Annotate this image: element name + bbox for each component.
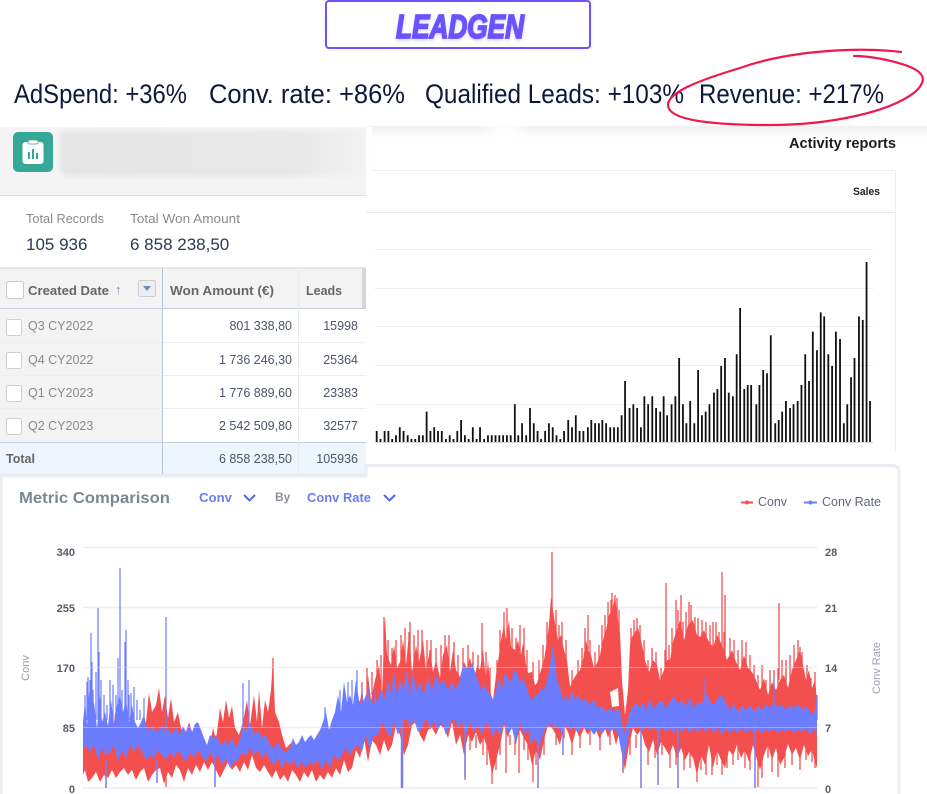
axis title: conv: Conv xyxy=(20,655,32,681)
left axis: 85 xyxy=(63,723,75,735)
left axis: 170 xyxy=(57,663,75,675)
row: Q4 CY2022: Q4 CY2022 xyxy=(28,353,93,367)
row: Q4 CY2022 xyxy=(6,352,358,368)
legend: Conv Rate xyxy=(822,495,881,509)
selector: conv rate: Conv Rate xyxy=(307,491,371,505)
panel: leads table xyxy=(0,127,372,474)
stat: total records xyxy=(26,212,104,254)
row: total: 6 858 238,50 xyxy=(219,452,292,466)
row: Q1 CY2023: 1 776 889,60 xyxy=(219,386,292,400)
panel: metric comparison xyxy=(1,466,899,794)
left axis: 255 xyxy=(57,603,75,615)
table header: Created Date xyxy=(28,284,109,298)
table header: Leads xyxy=(306,284,342,298)
axis title: conv rate: Conv Rate xyxy=(871,642,883,694)
row: Q4 CY2022: 25364 xyxy=(323,353,358,367)
callout: hand-drawn red ellipse xyxy=(668,50,923,125)
right axis: 21 xyxy=(825,603,837,615)
right axis: 28 xyxy=(825,547,837,559)
row: total: 105936 xyxy=(316,452,358,466)
row: Q3 CY2022: Q3 CY2022 xyxy=(28,319,93,333)
row: total: Total xyxy=(6,452,35,466)
stat: total won amount: 6 858 238,50 xyxy=(130,235,229,254)
stat: total records: 105 936 xyxy=(26,235,87,254)
left axis xyxy=(57,547,75,794)
stats row xyxy=(14,79,884,109)
selector: conv: Conv xyxy=(199,491,232,505)
stat: total won amount xyxy=(130,212,241,254)
row: Q4 CY2022: 1 736 246,30 xyxy=(219,353,292,367)
stat: total records: Total Records xyxy=(26,212,104,226)
blurred title xyxy=(60,131,370,176)
label: by: By xyxy=(275,490,291,504)
title badge: leadgen: LEADGEN xyxy=(396,8,525,45)
row: Q3 CY2022: 15998 xyxy=(323,319,358,333)
row: Q2 CY2023: Q2 CY2023 xyxy=(28,419,93,433)
row: total xyxy=(6,452,358,466)
bar chart: sales xyxy=(377,262,870,442)
stat: qualified leads: Qualified Leads: +103% xyxy=(425,79,684,109)
title badge: leadgen xyxy=(326,1,590,48)
legend xyxy=(741,495,881,509)
heading: metric comparison: Metric Comparison xyxy=(19,490,170,507)
table header xyxy=(6,280,342,298)
table header: Won Amount (€) xyxy=(170,284,274,298)
row: Q3 CY2022: 801 338,80 xyxy=(229,319,292,333)
stat: revenue: Revenue: +217% xyxy=(699,79,884,109)
row: Q1 CY2023: Q1 CY2023 xyxy=(28,386,93,400)
row: Q2 CY2023: 2 542 509,80 xyxy=(219,419,292,433)
line series: conv rate xyxy=(83,568,817,788)
right axis xyxy=(825,547,838,794)
label: sales: Sales xyxy=(853,186,880,198)
heading: activity reports: Activity reports xyxy=(789,136,896,152)
table header: ↑ xyxy=(115,282,122,297)
row: Q2 CY2023 xyxy=(6,418,358,434)
row: Q3 CY2022 xyxy=(6,319,358,336)
right axis: 7 xyxy=(825,723,831,735)
left axis: 340 xyxy=(57,547,75,559)
row: Q1 CY2023 xyxy=(6,386,358,402)
panel: activity reports xyxy=(366,120,927,452)
legend: Conv xyxy=(758,495,788,509)
icon: report clipboard xyxy=(13,132,53,172)
line series: conv xyxy=(83,552,817,787)
stat: conv rate: Conv. rate: +86% xyxy=(209,79,405,109)
stat: total won amount: Total Won Amount xyxy=(130,212,241,226)
selector: conv xyxy=(199,491,255,505)
right axis: 14 xyxy=(825,663,838,675)
row: Q2 CY2023: 32577 xyxy=(323,419,358,433)
stat: adspend: AdSpend: +36% xyxy=(14,79,187,109)
title badge: leadgen: LEADGEN xyxy=(396,10,525,47)
table xyxy=(0,268,366,474)
row: Q1 CY2023: 23383 xyxy=(323,386,358,400)
